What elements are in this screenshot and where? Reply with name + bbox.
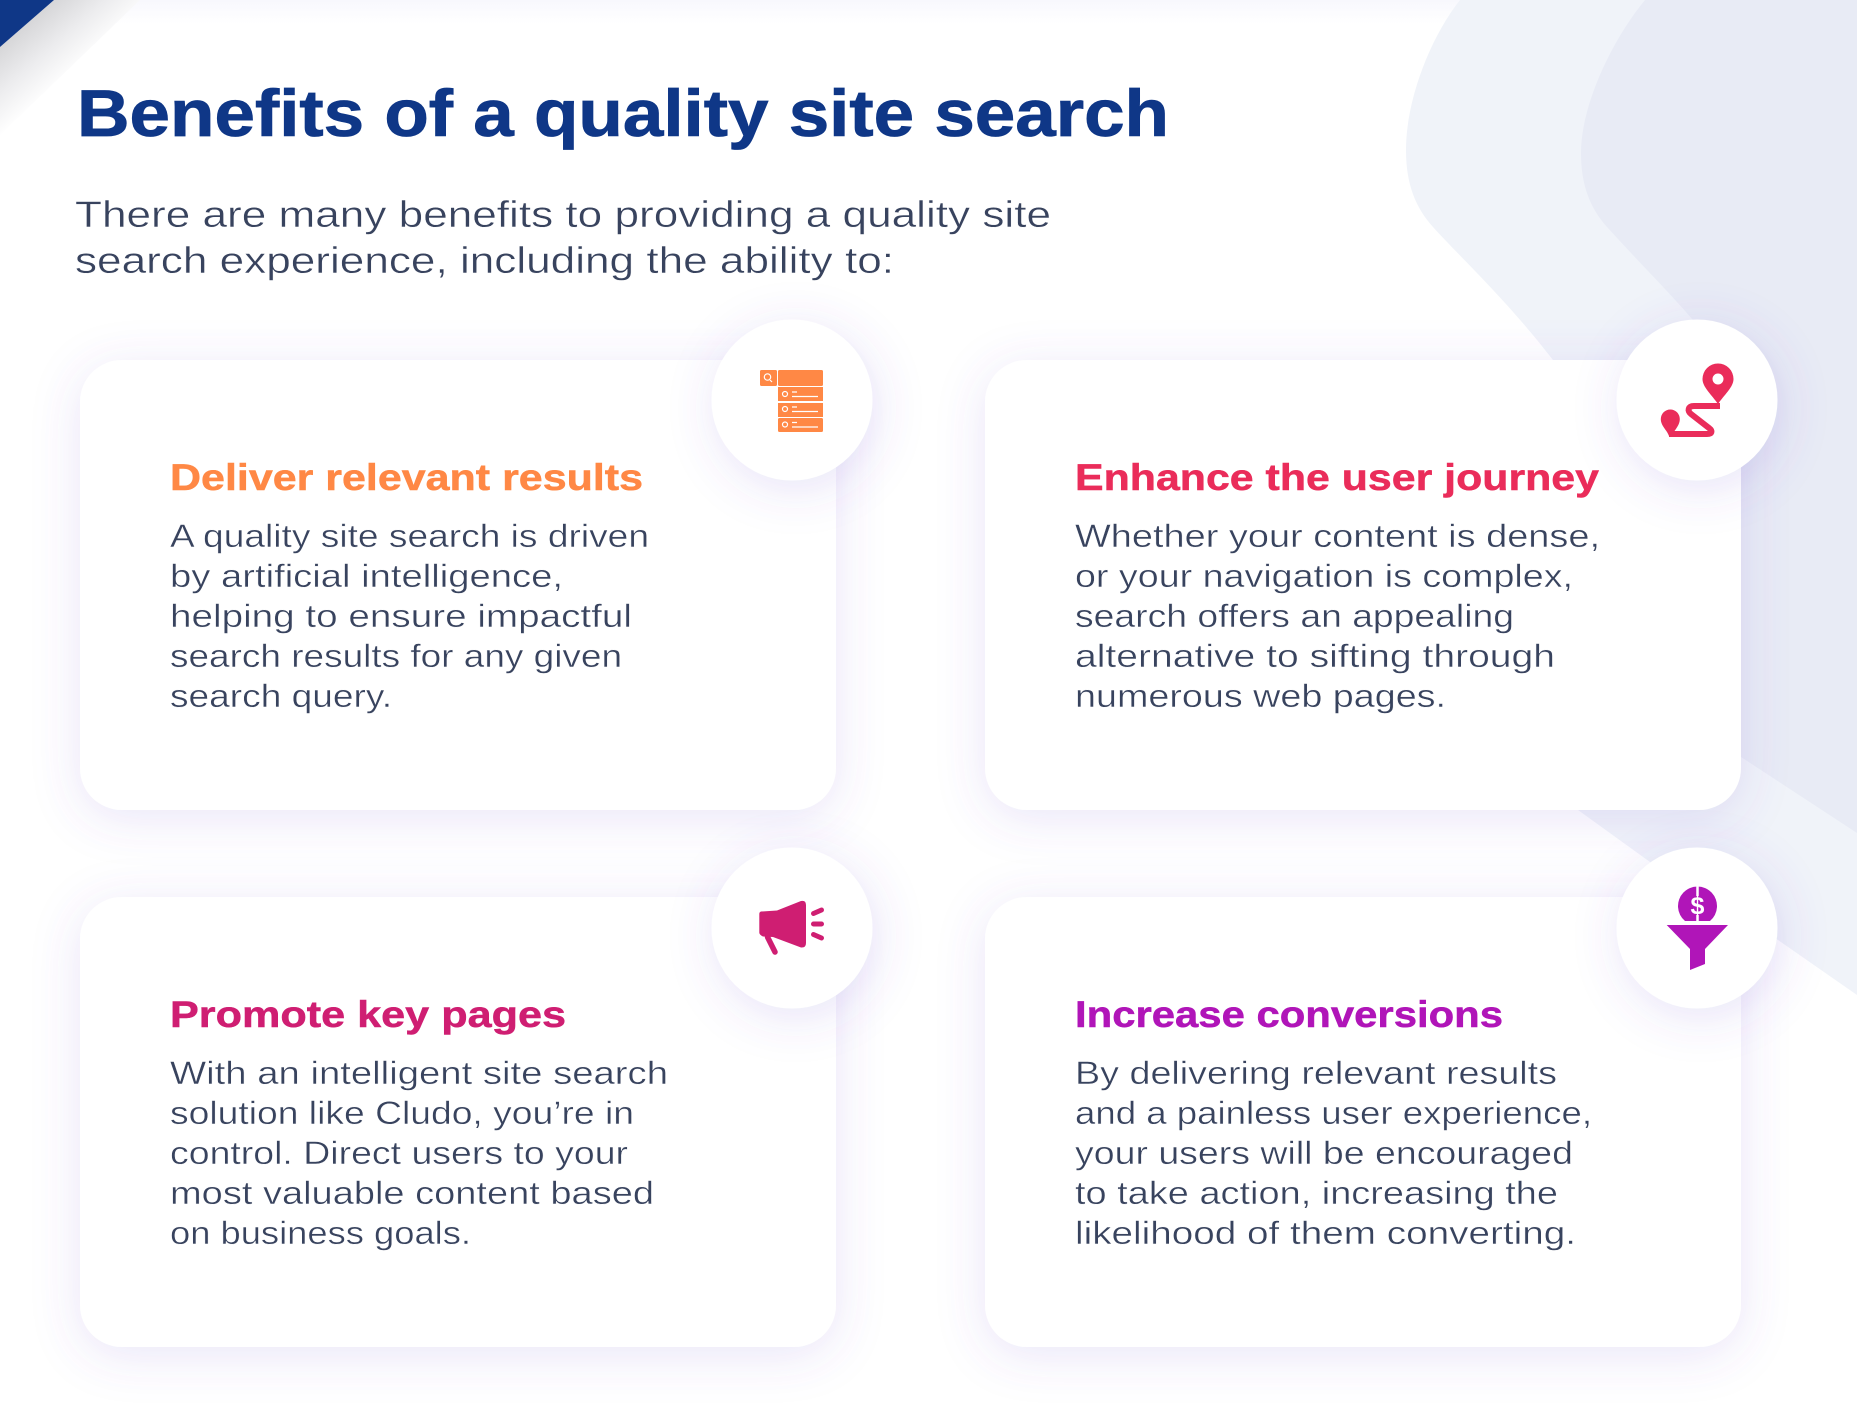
heading: Enhance the user journey [1075,457,1599,498]
body text: alternative to sifting through [1075,638,1555,674]
corner ribbon [0,0,140,135]
body text: and a painless user experience, [1075,1095,1592,1131]
panel: enhance the user journey [985,320,1778,810]
intro text [75,194,1051,281]
body text: search offers an appealing [1075,598,1514,634]
body text [170,1055,668,1251]
body text: helping to ensure impactful [170,598,632,634]
body text [170,518,649,714]
icon: conversion funnel: $ [1691,892,1705,920]
body text: A quality site search is driven [170,518,649,554]
heading: Increase conversions [1075,994,1503,1035]
background: top fade [0,0,1857,24]
body text: by artificial intelligence, [170,558,563,594]
body text: Whether your content is dense, [1075,518,1600,554]
body text: search results for any given [170,638,622,674]
body text: on business goals. [170,1215,471,1251]
heading: Promote key pages [170,994,566,1035]
body text: By delivering relevant results [1075,1055,1557,1091]
intro text: search experience, including the ability to: [75,240,894,281]
body text: solution like Cludo, you’re in [170,1095,634,1131]
body text: likelihood of them converting. [1075,1215,1576,1251]
body text: your users will be encouraged [1075,1135,1573,1171]
icon: conversion funnel [1616,848,1778,1008]
body text: control. Direct users to your [170,1135,628,1171]
body text: or your navigation is complex, [1075,558,1573,594]
body text: With an intelligent site search [170,1055,668,1091]
body text [1075,518,1600,714]
intro text: There are many benefits to providing a quality site [75,194,1051,235]
heading: Deliver relevant results [170,457,643,498]
icon: megaphone [712,848,872,1008]
panel: promote key pages [80,848,872,1347]
background: light wave shape [1406,0,1857,995]
body text: most valuable content based [170,1175,654,1211]
panel: deliver relevant results [80,320,872,810]
title: Benefits of a quality site search [77,76,1169,150]
body text: to take action, increasing the [1075,1175,1558,1211]
icon: map route [1616,320,1778,480]
body text: numerous web pages. [1075,678,1446,714]
icon: search results list [712,320,872,480]
background: darker wave shape [1581,0,1857,833]
panel: increase conversions [985,848,1778,1347]
body text [1075,1055,1592,1251]
body text: search query. [170,678,392,714]
